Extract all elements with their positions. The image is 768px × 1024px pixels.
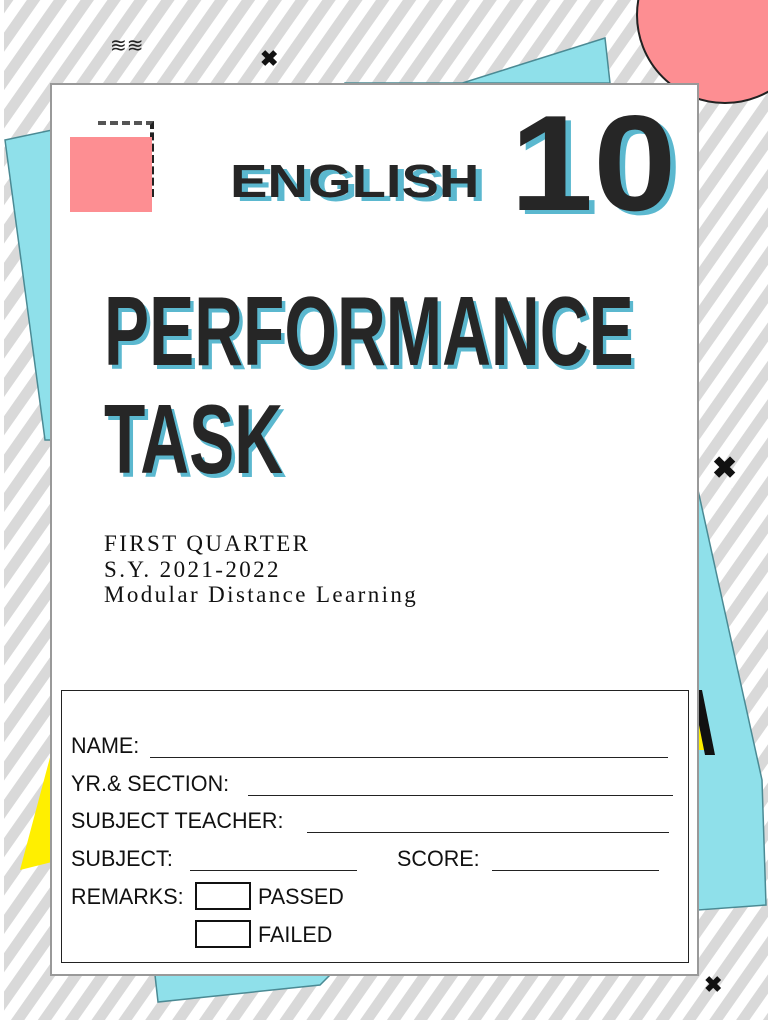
- heading: ENGLISH 10: ENGLISH: [230, 155, 479, 207]
- text block: quarter info: Modular Distance Learning: [104, 582, 418, 607]
- panel: student form: FAILED: [258, 922, 332, 947]
- checkbox: failed: [195, 920, 251, 948]
- panel: student form: PASSED: [258, 884, 344, 909]
- title: PERFORMANCE TASK: TASK: [104, 384, 283, 494]
- background: stripes and shapes: ✖: [712, 452, 737, 485]
- heading: ENGLISH 10: [230, 87, 676, 239]
- panel: student form: YR.& SECTION:: [71, 771, 229, 796]
- title: PERFORMANCE TASK: [104, 276, 634, 494]
- checkbox: passed: [195, 882, 251, 910]
- panel: student form: [61, 690, 689, 963]
- text block: quarter info: FIRST QUARTER: [104, 531, 310, 556]
- background: stripes and shapes: ✖: [704, 972, 722, 997]
- icon: pink square with dashed frame: [70, 121, 154, 212]
- panel: student form: SCORE:: [397, 846, 480, 871]
- title: PERFORMANCE TASK: PERFORMANCE: [104, 276, 634, 386]
- panel: student form: NAME:: [71, 733, 139, 758]
- background: stripes and shapes: ✖: [260, 46, 278, 71]
- text block: quarter info: [104, 531, 418, 607]
- background: stripes and shapes: ≋≋: [110, 33, 144, 57]
- text block: quarter info: S.Y. 2021-2022: [104, 556, 281, 582]
- main white card: [50, 83, 699, 976]
- panel: student form: REMARKS:: [71, 884, 184, 909]
- panel: student form: SUBJECT TEACHER:: [71, 808, 283, 833]
- panel: student form: SUBJECT:: [71, 846, 173, 871]
- heading: ENGLISH 10: 10: [510, 87, 676, 239]
